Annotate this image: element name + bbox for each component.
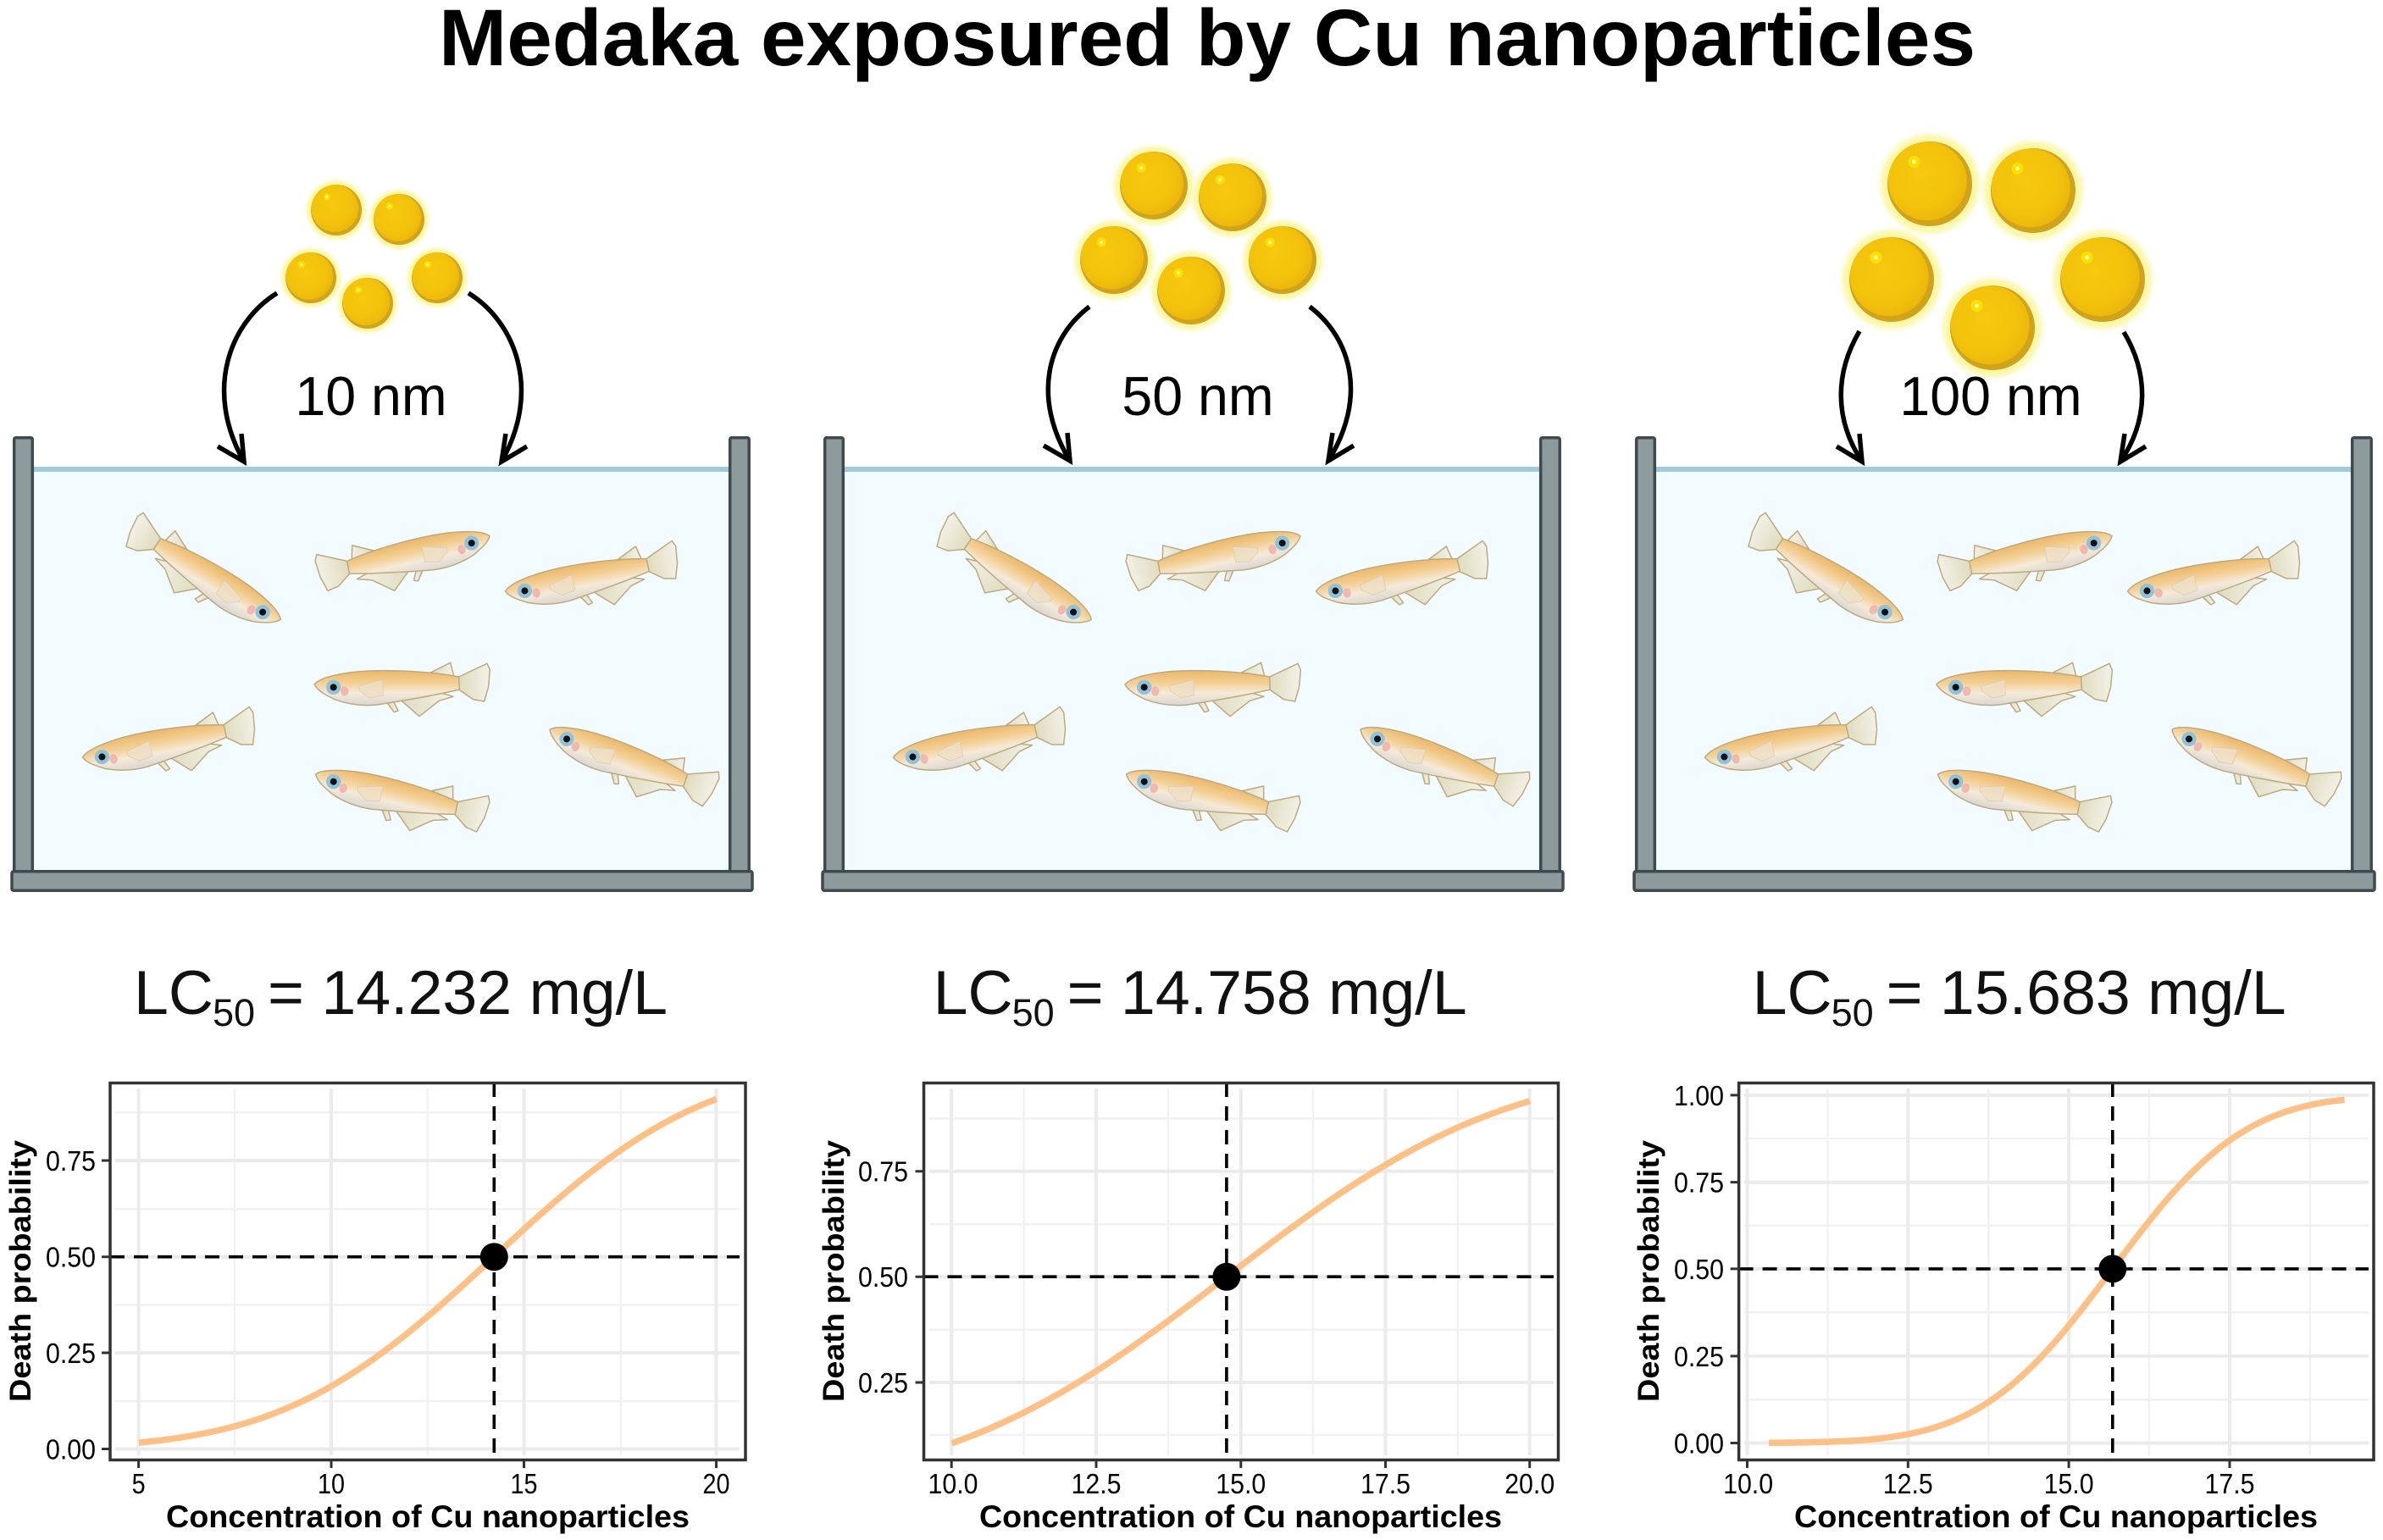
label: 10 nm: 10 nm bbox=[295, 366, 447, 427]
arrow: left into tank bbox=[1044, 307, 1089, 461]
x tick labels: 15.0 bbox=[1216, 1468, 1266, 1499]
panel: 10 nm exposure tank bbox=[12, 180, 752, 890]
LC50 value: 10 nm: 50 bbox=[213, 991, 255, 1034]
LC50 point bbox=[2098, 1255, 2126, 1282]
y tick labels bbox=[858, 1156, 908, 1399]
x tick labels bbox=[132, 1468, 730, 1499]
arrow: right into tank bbox=[468, 293, 527, 462]
y tick labels: 0.00 bbox=[46, 1433, 96, 1465]
arrow: right into tank bbox=[1310, 307, 1354, 461]
arrow: right into tank bbox=[2120, 332, 2146, 462]
chart: 100 nm death probability curve bbox=[1632, 1080, 2374, 1534]
x tick labels bbox=[928, 1468, 1554, 1499]
x tick labels: 15.0 bbox=[2044, 1468, 2094, 1499]
x tick labels: 15 bbox=[510, 1468, 537, 1499]
x axis title: Concentration of Cu nanoparticles bbox=[166, 1499, 690, 1534]
x tick labels: 12.5 bbox=[1883, 1468, 1933, 1499]
tank with water bbox=[12, 438, 752, 890]
x tick labels: 20 bbox=[703, 1468, 730, 1499]
LC50 value: 100 nm: 50 bbox=[1832, 991, 1874, 1034]
y axis title: Death probability bbox=[817, 1139, 851, 1402]
y axis title: Death probability bbox=[4, 1139, 37, 1402]
x tick labels: 17.5 bbox=[1361, 1468, 1410, 1499]
x tick labels: 10.0 bbox=[1723, 1468, 1773, 1499]
medaka fish group bbox=[1701, 511, 2344, 848]
y tick labels: 0.75 bbox=[46, 1145, 96, 1177]
tank with water bbox=[1634, 438, 2375, 890]
medaka fish group bbox=[79, 511, 722, 848]
y tick labels bbox=[46, 1145, 96, 1465]
nanoparticle cluster: 10 nm bbox=[281, 180, 467, 333]
y tick labels: 0.25 bbox=[858, 1367, 908, 1399]
y tick labels: 0.50 bbox=[46, 1242, 96, 1273]
arrow: left into tank bbox=[218, 293, 277, 462]
tank with water bbox=[823, 438, 1563, 890]
chart: 10 nm death probability curve bbox=[4, 1083, 745, 1534]
LC50 point bbox=[1212, 1263, 1240, 1291]
arrow: left into tank bbox=[1837, 331, 1862, 462]
label: 100 nm: 100 nm bbox=[1899, 366, 2082, 427]
panel: 50 nm exposure tank bbox=[823, 146, 1563, 890]
LC50 value: 50 nm: LC bbox=[934, 957, 1013, 1028]
y tick labels: 0.25 bbox=[1674, 1341, 1724, 1372]
LC50 value: 100 nm: = 15.683 mg/L bbox=[1887, 957, 2286, 1028]
x tick labels bbox=[1723, 1468, 2255, 1499]
nanoparticle cluster: 100 nm bbox=[1842, 134, 2152, 378]
y tick labels: 0.25 bbox=[46, 1338, 96, 1369]
y axis title: Death probability bbox=[1632, 1139, 1665, 1402]
x tick labels: 10.0 bbox=[928, 1468, 978, 1499]
x tick labels: 5 bbox=[132, 1468, 146, 1499]
y tick labels bbox=[1674, 1080, 1724, 1459]
y tick labels: 0.75 bbox=[858, 1156, 908, 1188]
curve bbox=[1769, 1100, 2345, 1443]
chart: 50 nm death probability curve bbox=[817, 1083, 1559, 1534]
y tick labels: 0.00 bbox=[1674, 1428, 1724, 1459]
curve bbox=[952, 1101, 1530, 1443]
y tick labels: 1.00 bbox=[1674, 1080, 1724, 1111]
x tick labels: 10 bbox=[318, 1468, 345, 1499]
x tick labels: 12.5 bbox=[1071, 1468, 1122, 1499]
x tick labels: 20.0 bbox=[1505, 1468, 1554, 1499]
x axis title: Concentration of Cu nanoparticles bbox=[979, 1499, 1502, 1534]
LC50 value: 100 nm: LC bbox=[1753, 957, 1832, 1028]
label: 50 nm: 50 nm bbox=[1122, 366, 1274, 427]
curve bbox=[139, 1099, 717, 1443]
LC50 value: 50 nm: = 14.758 mg/L bbox=[1067, 957, 1467, 1028]
LC50 value: 50 nm: 50 bbox=[1012, 991, 1055, 1034]
LC50 value: 10 nm: = 14.232 mg/L bbox=[268, 957, 668, 1028]
LC50 value: 10 nm: LC bbox=[134, 957, 213, 1028]
x tick labels: 17.5 bbox=[2204, 1468, 2255, 1499]
y tick labels: 0.50 bbox=[858, 1261, 908, 1293]
nanoparticle cluster: 50 nm bbox=[1074, 146, 1322, 330]
x axis title: Concentration of Cu nanoparticles bbox=[1794, 1499, 2318, 1534]
y tick labels: 0.75 bbox=[1674, 1167, 1724, 1199]
y tick labels: 0.50 bbox=[1674, 1254, 1724, 1285]
panel: 100 nm exposure tank bbox=[1634, 134, 2375, 890]
medaka fish group bbox=[889, 511, 1532, 848]
LC50 point bbox=[480, 1243, 508, 1271]
